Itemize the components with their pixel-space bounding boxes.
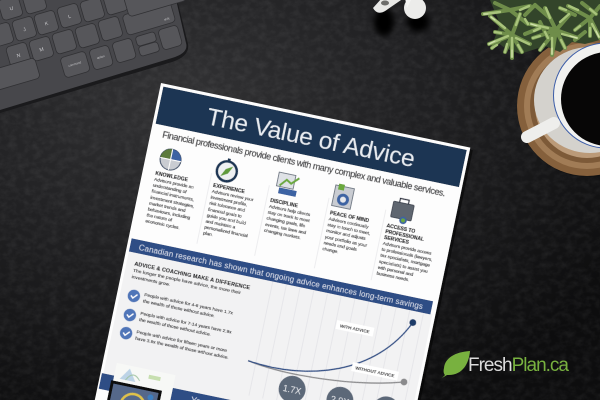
column: experience: guide you and build bbox=[206, 213, 247, 226]
column: peace of mind: stay in touch to meet, bbox=[327, 222, 371, 236]
column: access to professional services: to professionals (lawyers, bbox=[381, 247, 433, 262]
icon: compass bbox=[215, 157, 239, 183]
research section bbox=[103, 238, 435, 400]
keyboard: option bbox=[96, 54, 106, 60]
tablet image bbox=[105, 362, 176, 400]
column: experience: plan. bbox=[203, 231, 213, 237]
check item 2: People with advice for 7-14 years have 2.9x bbox=[140, 311, 233, 336]
coffee cup on wooden saucer bbox=[517, 35, 600, 177]
infographic sheet bbox=[75, 83, 473, 400]
column: experience: risk tolerance and bbox=[209, 201, 246, 213]
text block: advice and coaching: ADVICE & COACHING MAKE A DIFFERENCE bbox=[134, 261, 251, 292]
column: experience: financial goals to bbox=[208, 207, 243, 219]
column: access to professional services bbox=[376, 223, 438, 286]
column: access to professional services: business needs. bbox=[376, 271, 410, 282]
column: knowledge bbox=[145, 171, 200, 233]
check item 1 bbox=[126, 289, 234, 323]
title: The Value of Advice bbox=[204, 103, 417, 173]
column: peace of mind: needs and goals bbox=[323, 240, 358, 252]
column: knowledge: investment strategies, bbox=[150, 195, 195, 209]
icon: briefcase bbox=[390, 197, 415, 226]
badge 3.9X bbox=[370, 394, 402, 400]
keyboard: K bbox=[44, 21, 50, 27]
column: experience bbox=[203, 183, 257, 244]
column: access to professional services: PROFESSIONAL bbox=[385, 229, 425, 243]
icon: leaf bbox=[442, 351, 470, 378]
badge 1.7X: 1.7X bbox=[282, 383, 302, 397]
label: with advice: WITH ADVICE bbox=[340, 323, 370, 334]
column: discipline: DISCIPLINE bbox=[270, 198, 299, 210]
icon: discipline chart bbox=[275, 172, 300, 197]
column: knowledge: the nature of bbox=[146, 213, 173, 223]
icon: peace of mind bbox=[332, 183, 355, 209]
column: knowledge: financial instruments, bbox=[151, 189, 194, 202]
column: discipline: changing goals, life bbox=[266, 216, 306, 229]
keyboard bbox=[0, 0, 188, 116]
column: knowledge: KNOWLEDGE bbox=[155, 171, 189, 184]
panel background bbox=[103, 251, 432, 400]
title banner bbox=[156, 87, 467, 187]
text block: advice and coaching: investments grow. bbox=[131, 274, 171, 288]
column: discipline: stay on track to meet bbox=[267, 210, 311, 223]
column: peace of mind: monitor and adjusts bbox=[326, 228, 367, 241]
check item 3 bbox=[119, 326, 231, 361]
column: knowledge: behaviours, including bbox=[147, 207, 191, 220]
column: peace of mind bbox=[322, 210, 373, 260]
cup handle bbox=[527, 123, 554, 137]
checklist bbox=[119, 289, 238, 361]
check item 2 bbox=[123, 307, 233, 342]
keyboard: command bbox=[68, 60, 82, 68]
column: knowledge: understanding of bbox=[152, 183, 188, 195]
column: peace of mind: Advisors continually bbox=[328, 216, 370, 230]
plant bbox=[483, 0, 600, 58]
keyboard: shift bbox=[164, 16, 170, 22]
column: experience: Advisors review your bbox=[211, 189, 254, 202]
earbuds bbox=[373, 0, 429, 36]
check item 2: the wealth of those without advice. bbox=[138, 317, 211, 338]
check item 1: People with advice for 4-6 years have 1.7x bbox=[144, 292, 234, 317]
keyboard: L bbox=[68, 14, 72, 20]
column: peace of mind: change. bbox=[322, 246, 339, 254]
column: peace of mind: PEACE OF MIND bbox=[329, 210, 370, 224]
column: knowledge: Advisors provide an bbox=[154, 177, 195, 190]
column: discipline bbox=[264, 198, 313, 241]
column: experience: investment profile, bbox=[210, 195, 248, 207]
keyboard: J bbox=[23, 27, 27, 33]
column: discipline: Advisors help clients bbox=[269, 204, 311, 217]
column: access to professional services: specialists) to assist you bbox=[379, 259, 429, 274]
column: knowledge: economic cycles. bbox=[145, 218, 180, 231]
multiple badges bbox=[276, 373, 402, 400]
text block: advice and coaching: The longer the people have advice, the more their bbox=[132, 268, 242, 296]
check item 3: have 3.9x the wealth of those without advice. bbox=[135, 336, 229, 361]
icon: knowledge pie bbox=[158, 147, 183, 172]
column: peace of mind: your portfolio as your bbox=[325, 234, 368, 248]
logo: FreshPlan.ca bbox=[442, 351, 569, 378]
column: access to professional services: tax specialists, mortgage bbox=[380, 253, 431, 268]
column: access to professional services: ACCESS TO bbox=[386, 223, 416, 235]
section heading band: Canadian research has shown that ongoing advice enhances long-term savings bbox=[138, 243, 424, 311]
logo: FreshPlan.ca: FreshPlan.ca bbox=[468, 355, 569, 376]
check item 3: People with advice for fifteen years or more bbox=[136, 329, 228, 354]
keyboard: N bbox=[16, 53, 22, 59]
column: access to professional services: Advisors provide access bbox=[382, 241, 433, 256]
column: knowledge: market trends and bbox=[149, 201, 186, 213]
keyboard: M bbox=[39, 47, 45, 54]
column: discipline: events, tax laws and bbox=[265, 222, 307, 235]
label: without advice: WITHOUT ADVICE bbox=[355, 365, 395, 378]
bottom band bbox=[99, 373, 407, 400]
column: discipline: changing markets. bbox=[264, 228, 301, 240]
keyboard: U bbox=[9, 6, 15, 12]
column: access to professional services: SERVICES bbox=[383, 235, 410, 246]
column: experience: personalized financial bbox=[204, 225, 248, 239]
label: with advice bbox=[335, 320, 374, 337]
column: experience: EXPERIENCE bbox=[212, 183, 246, 195]
label: without advice bbox=[351, 362, 399, 381]
subtitle: Financial professionals provide clients with many complex and valuable services. bbox=[161, 130, 446, 198]
text block: advice and coaching bbox=[131, 261, 251, 304]
check item 1: the wealth of those without advice. bbox=[142, 298, 215, 319]
column: access to professional services: with personal and bbox=[377, 265, 414, 277]
column: experience: and maintain a bbox=[205, 219, 236, 230]
line chart: savings with and without advice bbox=[247, 288, 420, 397]
